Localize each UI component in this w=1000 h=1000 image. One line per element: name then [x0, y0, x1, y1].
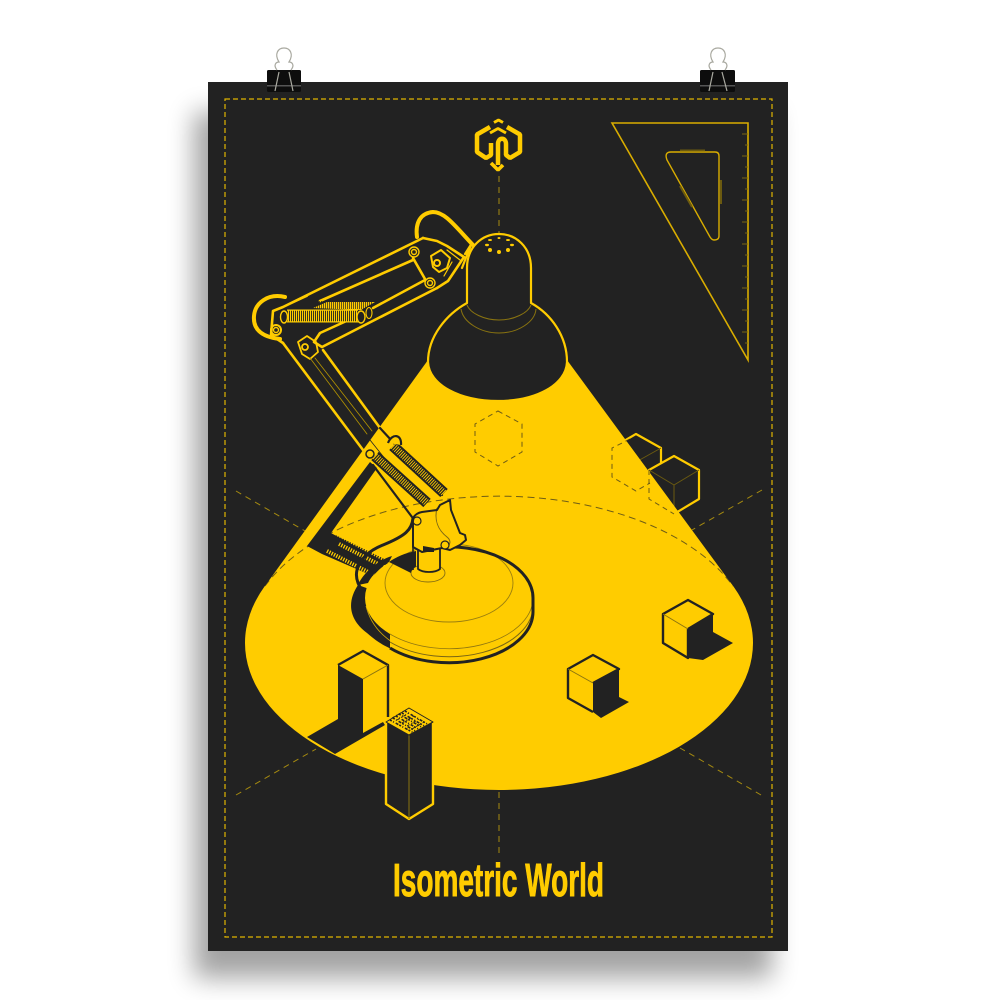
logo [477, 120, 520, 170]
QR code [386, 708, 433, 735]
post [411, 564, 445, 582]
dark cubes behind the cone [612, 434, 699, 514]
binder clip left [267, 48, 301, 92]
arm upper joints [271, 247, 460, 359]
yellow cube middle [568, 655, 629, 718]
dark base crescent shadow [351, 585, 392, 649]
arm shadow on the floor [307, 462, 393, 577]
dashed floor ellipse arc [265, 496, 733, 586]
title: Isometric World [393, 854, 604, 906]
tall yellow column with shadow [307, 651, 388, 754]
dashed border [225, 99, 772, 937]
poster drop shadow [194, 112, 772, 978]
radial dashed guide lines [236, 176, 762, 857]
lower arm dark lines [370, 428, 442, 517]
poster background [208, 82, 788, 951]
lower arm yellow lines [283, 343, 380, 450]
cone of light [245, 360, 753, 790]
base and post [351, 500, 533, 663]
binder clip right [700, 48, 735, 92]
dashed hexagons on the light [475, 411, 674, 514]
lamp head [428, 234, 567, 401]
base disc [365, 547, 533, 663]
lower springs [366, 436, 444, 503]
yellow cube right [663, 600, 733, 660]
vent dots [485, 237, 514, 254]
upper spring [280, 302, 375, 323]
dark tower with QR code top [386, 708, 433, 819]
post shadow wedge on disc [389, 551, 416, 574]
lamp arm [254, 212, 473, 517]
power cable [356, 518, 413, 592]
joint bracket [413, 500, 466, 552]
set square ruler [612, 123, 748, 360]
upper arm [254, 212, 473, 347]
